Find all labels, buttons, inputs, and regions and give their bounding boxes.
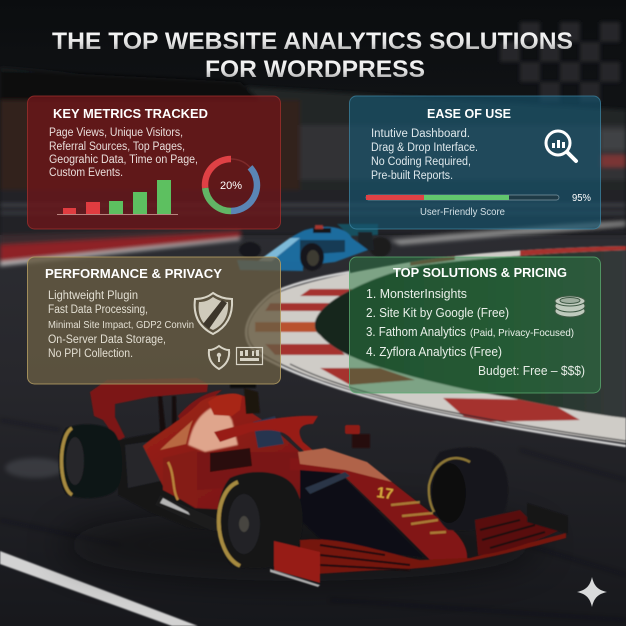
car shadow	[60, 509, 540, 581]
title: FOR WORDPRESS	[205, 56, 425, 83]
text: performance list: Fast Data Processing,	[48, 304, 148, 316]
text: metrics list: Custom Events.	[49, 167, 123, 179]
car: sponsor marks	[391, 502, 446, 533]
text: solutions list: 3. Fathom Analytics	[366, 325, 466, 339]
text: ease list: Drag & Drop Interface.	[371, 142, 478, 154]
car: halo	[214, 416, 318, 455]
progress bar: user-friendly score: 95%	[572, 193, 591, 204]
text: performance list: Minimal Site Impact, GDP2 Convin	[48, 320, 194, 331]
car: near front tyre	[217, 472, 303, 568]
blue background race car	[237, 224, 391, 271]
icon: data badge	[236, 348, 262, 364]
text: metrics list: Referral Sources, Top Pages,	[49, 141, 185, 153]
car: number 17: 17	[375, 484, 394, 503]
car: dark chassis	[300, 470, 425, 558]
donut chart: 20%	[220, 180, 242, 192]
text: performance list	[48, 290, 194, 360]
text: metrics list: Page Views, Unique Visitors,	[49, 127, 183, 139]
text: solutions list	[366, 287, 574, 359]
car: sidepod	[163, 450, 197, 508]
progress bar: user-friendly score	[366, 193, 591, 218]
text: ease list: Intutive Dashboard.	[371, 128, 470, 140]
text: solutions list: 4. Zyflora Analytics (Free)	[366, 345, 502, 359]
icon: coin stack	[555, 296, 585, 317]
panel: ease of use	[350, 96, 600, 229]
car: nose	[290, 458, 467, 562]
car: mirror	[345, 425, 360, 434]
heading: ease of use: EASE OF USE	[427, 106, 511, 121]
car: driver	[253, 416, 284, 448]
text: metrics list	[49, 127, 198, 179]
car: front wing	[300, 533, 566, 575]
red foreground race car	[58, 378, 568, 587]
icon: magnifier with chart	[546, 131, 576, 161]
progress bar: user-friendly score: User-Friendly Score	[420, 206, 505, 218]
icon: small lock shield	[209, 346, 229, 369]
text: solutions list: 1. MonsterInsights	[366, 287, 467, 301]
text: performance list: On-Server Data Storage,	[48, 334, 166, 346]
icon: sparkle watermark	[577, 577, 607, 607]
panel: key metrics tracked	[28, 96, 280, 229]
title: THE TOP WEBSITE ANALYTICS SOLUTIONS	[52, 28, 573, 55]
text: solutions list: 2. Site Kit by Google (Free)	[366, 306, 509, 320]
car: rear tyre	[58, 424, 122, 498]
text: ease list	[371, 128, 478, 182]
heading: performance: PERFORMANCE & PRIVACY	[45, 266, 222, 281]
text: solutions list: (Paid, Privacy-Focused)	[470, 327, 574, 339]
heading: top solutions: TOP SOLUTIONS & PRICING	[393, 265, 567, 280]
car: far front tyre	[429, 447, 508, 531]
icon: large shield	[195, 293, 232, 334]
car: rear wing	[90, 378, 208, 441]
panel: top solutions and pricing	[350, 257, 600, 393]
text: performance list: No PPI Collection.	[48, 348, 133, 360]
car: engine cover highlight	[188, 403, 238, 452]
text: ease list: No Coding Required,	[371, 156, 471, 168]
text: metrics list: Geograhic Data, Time on Page,	[49, 154, 198, 166]
heading: key metrics: KEY METRICS TRACKED	[53, 106, 208, 121]
donut chart	[205, 159, 257, 211]
text: performance list: Lightweight Plugin	[48, 290, 138, 302]
text: ease list: Pre-built Reports.	[371, 170, 453, 182]
track: infield and kerb	[246, 240, 626, 446]
panel: performance and privacy	[28, 257, 280, 384]
text: budget: Budget: Free – $$$)	[478, 364, 585, 378]
title	[52, 28, 573, 83]
car: body	[143, 394, 345, 515]
car: floor and rear suspension	[118, 430, 220, 530]
bar chart	[57, 180, 178, 215]
